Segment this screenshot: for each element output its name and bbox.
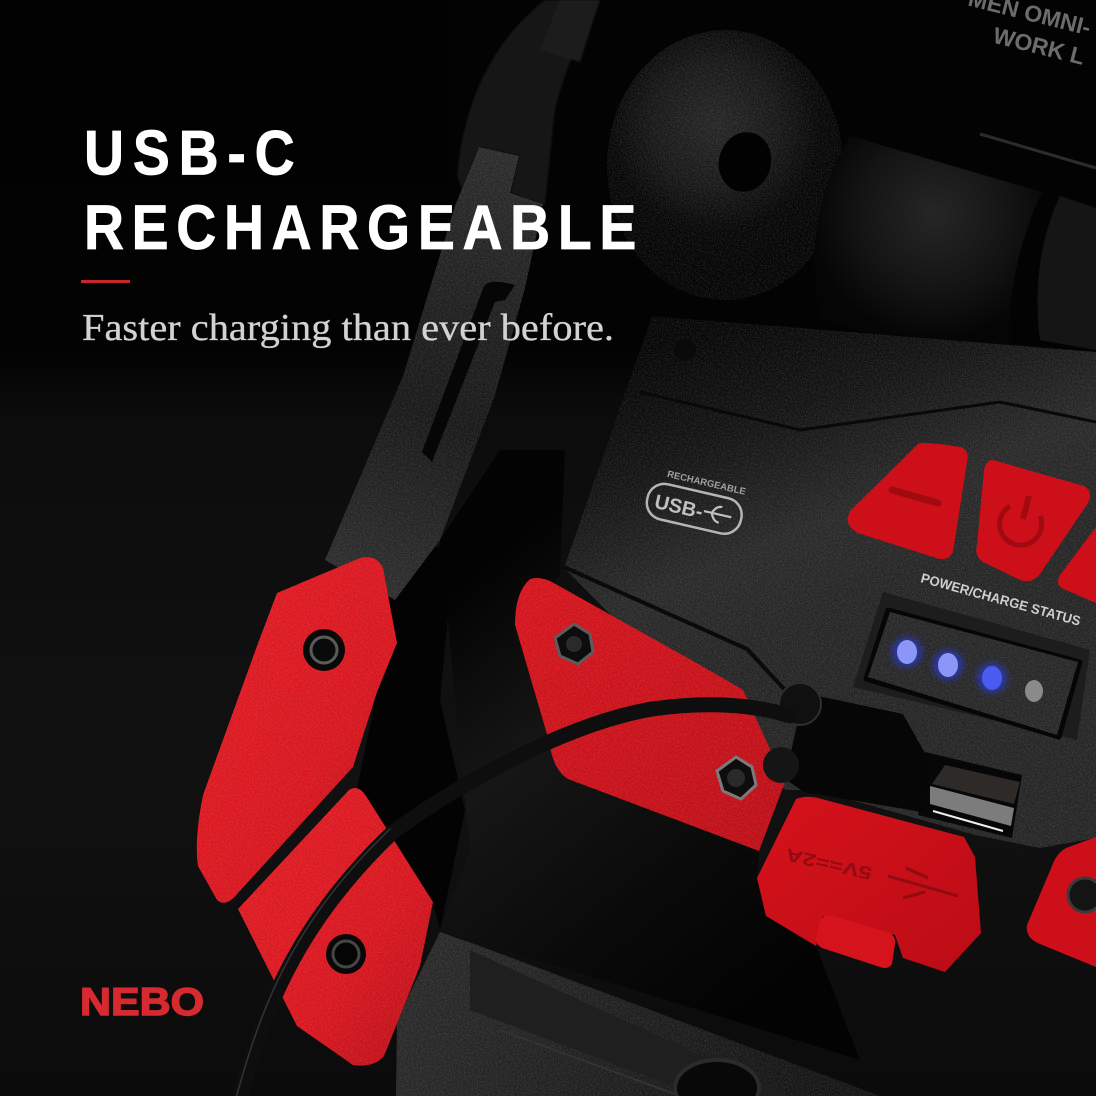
USB cap tab — [816, 915, 895, 968]
USB-C recharge badge — [643, 466, 748, 537]
USB-C connector — [763, 683, 930, 812]
USB port cap: 5V==2A — [784, 844, 874, 884]
USB-C recharge badge: RECHARGEABLE — [666, 469, 747, 498]
USB port — [918, 752, 1022, 838]
status label: POWER/CHARGE STATUS — [919, 570, 1082, 629]
button: power — [976, 460, 1090, 581]
USB-C recharge badge: USB- — [652, 491, 705, 523]
control panel body — [564, 316, 1096, 848]
NEBO logo: NEBO — [80, 981, 204, 1024]
button: right edge — [1058, 527, 1096, 603]
black shadow top area — [450, 0, 1096, 360]
title: USB-C — [84, 117, 304, 188]
left frame arm — [325, 147, 543, 600]
red pad: upper left — [197, 557, 397, 903]
shadow next to left pads — [357, 540, 465, 930]
device label text — [959, 0, 1095, 70]
interior frame plane — [440, 450, 860, 1060]
main cylinder — [814, 134, 1096, 382]
rear handle hub — [457, 0, 600, 205]
red pad: lower left — [238, 788, 433, 1066]
red pad: center — [515, 578, 785, 851]
USB port cap — [757, 797, 981, 972]
charging cable — [236, 705, 790, 1096]
title — [84, 117, 644, 263]
red pad: lower right — [1027, 837, 1096, 967]
title: RECHARGEABLE — [84, 192, 644, 263]
LED status panel — [853, 592, 1090, 740]
pad screws — [303, 624, 756, 974]
device label text: WORK L — [991, 22, 1087, 70]
textured hub disc with hole — [607, 30, 843, 300]
bottom frame arm — [396, 932, 880, 1096]
red divider — [81, 280, 130, 283]
button: minus — [848, 443, 968, 559]
subtitle: Faster charging than ever before. — [82, 307, 614, 349]
